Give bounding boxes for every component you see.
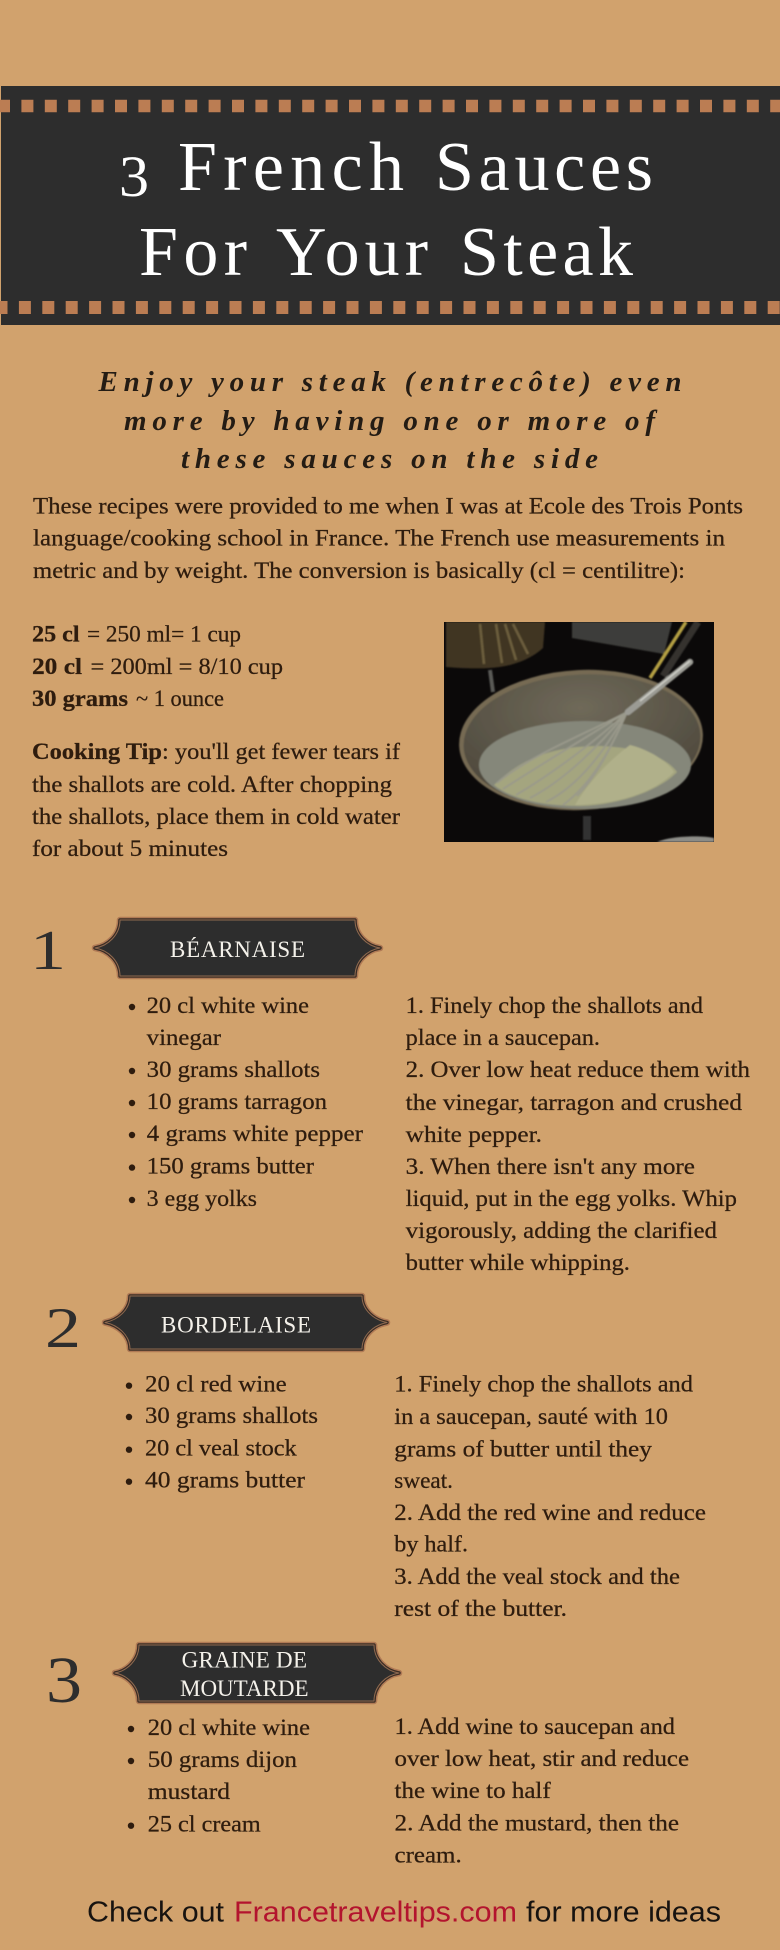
tagline: Enjoy your steak (entrecôte) even (98, 366, 682, 398)
pan body highlight (583, 816, 591, 840)
tagline: these sauces on the side (181, 443, 598, 475)
ingredients list: 25 cl cream (148, 1812, 261, 1837)
cooking tip: for about 5 minutes (32, 836, 228, 861)
photo: saucepan with whisk (444, 622, 714, 842)
method steps: by half. (394, 1532, 468, 1557)
title banner (0, 86, 780, 325)
ingredients list: 50 grams dijon (148, 1747, 298, 1772)
method steps: 1. Finely chop the shallots and (406, 993, 704, 1018)
conversions: 20 cl (32, 654, 82, 679)
ingredients list: 10 grams tarragon (147, 1089, 328, 1114)
tagline: more by having one or more of (124, 405, 658, 437)
section 1: Bearnaise (30, 920, 751, 1275)
whisk wires (497, 712, 627, 805)
method steps (394, 1714, 689, 1868)
intro paragraph (33, 494, 743, 583)
banner: Graine de moutarde: GRAINE DE (182, 1648, 307, 1673)
method steps (406, 993, 751, 1275)
ingredients list: 3 egg yolks (147, 1186, 257, 1211)
banner: Bordelaise (105, 1296, 387, 1349)
title line 1: Sauces (435, 129, 653, 206)
footer call to action: Francetraveltips.com (234, 1897, 517, 1929)
method steps: grams of butter until they (394, 1437, 653, 1462)
intro paragraph: language/cooking school in France. The French use measurements in (33, 526, 726, 551)
background pot contents (446, 622, 545, 668)
banner: Graine de moutarde (115, 1645, 399, 1701)
intro paragraph: These recipes were provided to me when I was at Ecole des Trois Ponts (33, 494, 743, 518)
cooking tip: Cooking Tip (32, 739, 162, 764)
title line 2 (139, 214, 633, 291)
conversions: = 250 ml= 1 cup (87, 622, 241, 647)
ingredients list: vinegar (147, 1025, 221, 1050)
ingredients list: 30 grams shallots (147, 1057, 320, 1082)
banner: Bearnaise: BÉARNAISE (170, 937, 305, 962)
gold utensil handle (650, 622, 686, 678)
section 3: Graine de moutarde (46, 1644, 689, 1868)
intro paragraph: metric and by weight. The conversion is basically (cl = centilitre): (33, 558, 685, 583)
tagline (98, 366, 682, 475)
method steps: 1. Add wine to saucepan and (394, 1714, 676, 1739)
method steps: 2. Over low heat reduce them with (406, 1057, 751, 1082)
ingredients list: 20 cl white wine (148, 1715, 310, 1740)
method steps: the vinegar, tarragon and crushed (406, 1090, 743, 1115)
method steps: 3. Add the veal stock and the (394, 1564, 680, 1589)
method steps: butter while whipping. (406, 1250, 630, 1275)
ingredients list (128, 1715, 310, 1837)
banner: Bordelaise: BORDELAISE (161, 1313, 311, 1338)
cooking tip: the shallots are cold. After chopping (32, 772, 393, 797)
method steps: over low heat, stir and reduce (394, 1746, 689, 1771)
footer call to action (87, 1897, 721, 1929)
conversions: ~ 1 ounce (136, 686, 224, 711)
background metal panel (572, 622, 672, 654)
title line 2: For (139, 214, 247, 291)
method steps: sweat. (394, 1468, 453, 1493)
cooking tip: the shallots, place them in cold water (32, 804, 400, 829)
conversions (32, 622, 283, 711)
method steps: the wine to half (394, 1778, 551, 1803)
ingredients list: 20 cl white wine (147, 993, 309, 1018)
ingredients list: 30 grams shallots (145, 1403, 318, 1428)
method steps: 2. Add the red wine and reduce (394, 1500, 706, 1525)
method steps: cream. (394, 1843, 462, 1868)
method steps: white pepper. (406, 1122, 542, 1147)
conversions: = 200ml = 8/10 cup (90, 654, 283, 679)
method steps: liquid, put in the egg yolks. Whip (406, 1186, 737, 1211)
title line 1: 3 (119, 144, 149, 209)
title line 1: French (178, 129, 404, 206)
ingredients list: 150 grams butter (147, 1154, 314, 1179)
sauce (479, 721, 691, 809)
ingredients list: 4 grams white pepper (147, 1121, 363, 1146)
ingredients list: 20 cl veal stock (145, 1436, 297, 1461)
method steps: rest of the butter. (394, 1596, 567, 1621)
title line 2: Your (276, 214, 428, 291)
footer call to action: Check out (87, 1897, 224, 1929)
cooking tip: : you'll get fewer tears if (162, 739, 400, 764)
saucepan rim and interior (456, 664, 706, 816)
conversions: 25 cl (32, 622, 80, 647)
method steps: vigorously, adding the clarified (406, 1218, 718, 1243)
number 3: 3 (46, 1644, 82, 1717)
title line 2: Steak (460, 214, 633, 291)
banner: Graine de moutarde: MOUTARDE (180, 1676, 308, 1701)
number 1: 1 (30, 920, 66, 982)
method steps: 2. Add the mustard, then the (394, 1811, 679, 1836)
method steps: 1. Finely chop the shallots and (394, 1372, 694, 1397)
method steps: 3. When there isn't any more (406, 1154, 695, 1179)
ingredients list: 40 grams butter (145, 1468, 305, 1493)
ingredients list (126, 1372, 318, 1493)
number 2: 2 (45, 1297, 81, 1360)
banner: Bearnaise (95, 920, 380, 976)
whisk handle (628, 662, 690, 712)
footer call to action: for more ideas (526, 1897, 721, 1929)
ingredients list: mustard (148, 1779, 231, 1804)
ingredients list (129, 993, 363, 1211)
title line 1 (119, 129, 653, 209)
section 2: Bordelaise (45, 1296, 706, 1621)
method steps: place in a saucepan. (406, 1025, 600, 1050)
method steps (394, 1372, 706, 1621)
cooking tip (32, 739, 400, 861)
conversions: 30 grams (32, 686, 128, 711)
method steps: in a saucepan, sauté with 10 (394, 1404, 668, 1429)
ingredients list: 20 cl red wine (145, 1372, 287, 1397)
